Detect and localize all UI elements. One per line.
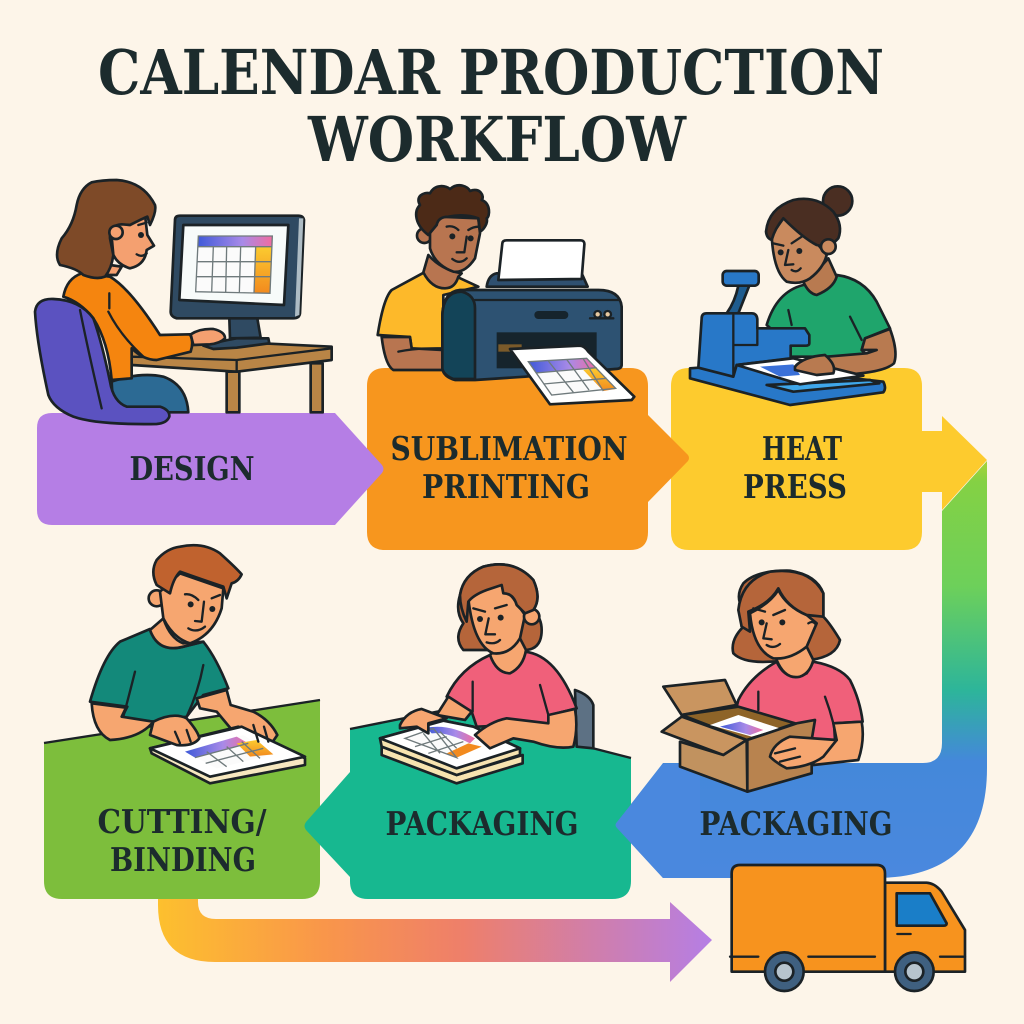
connector: gradient flow from heat press to packaging: [616, 461, 987, 878]
panel: design arrow: [37, 413, 384, 525]
illustration: cutting and binding worker: [90, 545, 305, 783]
step label: packaging teal: PACKAGING: [386, 804, 578, 843]
panel outline: green top edge: [44, 700, 320, 743]
illustration: blue panel packaging worker with box: [662, 571, 863, 792]
step label: heat press: [743, 429, 847, 506]
panel: packaging blue tip over teal: [616, 764, 700, 878]
step label: sublimation printing: SUBLIMATION: [390, 429, 628, 468]
title: WORKFLOW: [307, 103, 687, 176]
step label: packaging blue: PACKAGING: [700, 804, 892, 843]
panel: cutting and binding green: [44, 700, 320, 899]
step label: cutting and binding: CUTTING/: [98, 802, 267, 841]
illustration: teal panel packaging worker: [380, 564, 593, 783]
step label: sublimation printing: [390, 429, 628, 506]
illustration: printer operator: [378, 185, 634, 404]
illustration: designer at computer: [35, 180, 332, 424]
step label: heat press: HEAT: [762, 429, 842, 468]
title: [98, 36, 884, 176]
step label: cutting and binding: [98, 802, 267, 879]
step label: design: DESIGN: [130, 449, 254, 488]
panel outline: teal top edge: [350, 705, 631, 758]
step label: cutting and binding: BINDING: [110, 840, 256, 879]
title: CALENDAR PRODUCTION: [98, 36, 884, 109]
panel: sublimation printing arrow: [367, 368, 689, 550]
arrow: shipping gradient arrow: [158, 895, 712, 982]
panel: heat press arrow: [671, 368, 987, 550]
illustration: delivery truck: [730, 865, 965, 991]
step label: heat press: PRESS: [743, 467, 847, 506]
step label: sublimation printing: PRINTING: [422, 467, 590, 506]
illustration: heat press operator: [690, 186, 895, 405]
panel: packaging teal arrow: [304, 705, 631, 899]
